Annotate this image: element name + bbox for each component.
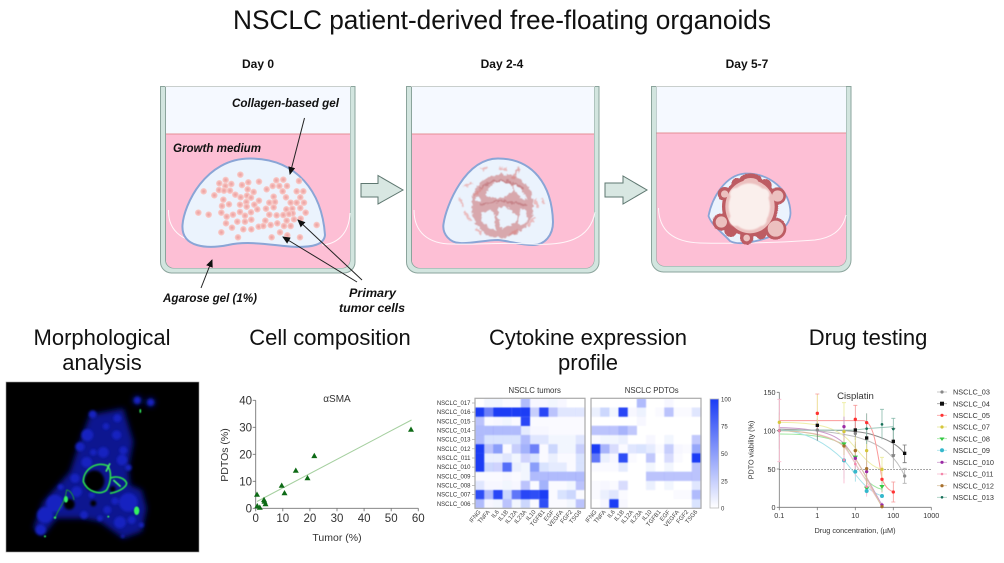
panel: confocal microscopy image <box>6 382 199 552</box>
row labels <box>437 401 471 508</box>
row labels: NSCLC_013 <box>437 438 471 444</box>
legend: NSCLC_07 <box>953 423 990 432</box>
heatmap: tumors <box>475 398 585 508</box>
heading: morphological analysis: Morphological <box>34 325 170 350</box>
row labels: NSCLC_006 <box>437 502 471 508</box>
label: primary tumor cells: tumor cells <box>339 303 405 315</box>
y ticks <box>764 388 776 512</box>
column labels PDTOs: FGF2 <box>676 509 691 525</box>
y ticks: 100 <box>764 426 776 436</box>
title: NSCLC patient-derived free-floating organoids <box>233 5 771 35</box>
heatmap frames <box>472 398 701 508</box>
x ticks: 0.1 <box>774 511 784 520</box>
y ticks: 10 <box>239 476 252 488</box>
heading: cell composition: Cell composition <box>249 325 411 350</box>
y ticks: 50 <box>768 465 776 474</box>
arrow: day 0 to day 2-4 <box>361 176 403 204</box>
y ticks: 150 <box>764 388 776 397</box>
panel: scatter chart aSMA <box>219 394 425 544</box>
colour scale: 25 <box>721 480 728 486</box>
data points <box>254 426 414 510</box>
row labels: NSCLC_007 <box>437 493 471 499</box>
y ticks: 30 <box>239 422 252 434</box>
row labels: NSCLC_014 <box>437 428 471 434</box>
axes <box>253 400 418 511</box>
organoid <box>713 173 786 245</box>
column labels PDTOs: IFNG <box>585 509 599 524</box>
column labels tumors: FGF2 <box>560 509 575 525</box>
x axis label: Drug concentration, (µM) <box>814 526 896 535</box>
panel: cisplatin dose response chart <box>746 388 994 535</box>
panel: cytokine heatmaps <box>437 386 732 529</box>
x ticks: 10 <box>276 513 289 525</box>
column labels tumors: TGFB1 <box>530 509 547 528</box>
colour scale: 0 <box>721 506 725 512</box>
y axis label: PDTOs (%) <box>219 428 231 482</box>
column labels PDTOs: TNFA <box>593 509 608 525</box>
legend: NSCLC_010 <box>953 458 994 467</box>
collagen gel <box>443 158 553 245</box>
heatmap title PDTOs: NSCLC PDTOs <box>625 386 679 395</box>
x ticks: 30 <box>331 513 343 525</box>
column labels PDTOs: IL1B <box>614 509 626 523</box>
y axis label: PDTO viability (%) <box>746 421 756 479</box>
panel: well day 2-4 <box>406 86 599 273</box>
column labels tumors: IFNG <box>469 509 483 524</box>
y ticks: 40 <box>239 396 252 408</box>
x ticks: 10 <box>851 511 859 520</box>
tumor cells <box>195 171 320 241</box>
collagen gel <box>708 173 790 243</box>
colour scale: 75 <box>721 424 728 430</box>
fibrous cell network <box>459 168 544 238</box>
green fluorescence <box>55 463 127 518</box>
heading: cytokine expression profile: profile <box>558 350 618 375</box>
label: growth medium: Growth medium <box>173 143 261 155</box>
row labels: NSCLC_016 <box>437 410 471 416</box>
x ticks: 1 <box>815 511 819 520</box>
legend <box>937 388 994 502</box>
heatmap: PDTOs <box>591 398 701 508</box>
column labels tumors <box>469 509 584 529</box>
heatmap title tumors: NSCLC tumors <box>508 386 561 395</box>
collagen gel droplet <box>182 158 325 247</box>
column labels PDTOs: TGFB1 <box>646 509 663 528</box>
column labels tumors: IL23A <box>514 509 528 525</box>
heading: Day 0: Day 0 <box>242 57 274 71</box>
column labels PDTOs: VEGFA <box>664 509 681 529</box>
heading: Day 2-4: Day 2-4 <box>481 57 524 71</box>
legend: NSCLC_011 <box>953 470 993 479</box>
column labels PDTOs: EGF <box>659 509 672 523</box>
legend: NSCLC_05 <box>953 411 990 420</box>
heading: drug testing: Drug testing <box>809 325 927 350</box>
chart title: Cisplatin <box>837 391 874 402</box>
legend: NSCLC_04 <box>953 399 990 408</box>
row labels: NSCLC_010 <box>437 465 471 471</box>
column labels PDTOs: IL23A <box>630 509 644 525</box>
arrow: day 2-4 to day 5-7 <box>605 176 647 204</box>
colour scale: 50 <box>721 452 728 458</box>
colour scale <box>710 398 732 512</box>
x ticks: 60 <box>412 513 425 525</box>
x ticks: 1000 <box>923 511 939 520</box>
regression line <box>257 420 412 502</box>
column labels PDTOs: IL6 <box>607 509 617 520</box>
reference line at 50% <box>779 468 931 470</box>
x axis label: Tumor (%) <box>312 532 362 544</box>
x ticks <box>252 513 425 525</box>
x ticks: 0 <box>252 513 259 525</box>
label: primary tumor cells: Primary <box>349 288 397 300</box>
column labels tumors: TSG6 <box>569 509 584 525</box>
label: collagen-based gel: Collagen-based gel <box>232 98 340 110</box>
annotation arrows <box>201 118 362 288</box>
column labels PDTOs <box>585 509 700 529</box>
heading: Day 5-7: Day 5-7 <box>726 57 769 71</box>
y ticks <box>239 396 252 516</box>
label: primary tumor cells <box>339 288 405 315</box>
agarose curve <box>168 210 350 245</box>
axes <box>777 392 931 510</box>
error bars <box>777 394 907 507</box>
legend: NSCLC_012 <box>953 481 994 490</box>
markers <box>778 412 906 508</box>
chart title: αSMA <box>323 394 351 405</box>
y ticks: 20 <box>239 450 252 462</box>
x ticks <box>774 511 939 520</box>
x ticks: 20 <box>304 513 316 525</box>
y ticks: 0 <box>246 504 252 516</box>
x ticks: 100 <box>887 511 899 520</box>
column labels tumors: EGF <box>543 509 556 523</box>
x ticks: 40 <box>358 513 370 525</box>
heading: morphological analysis: analysis <box>62 350 142 375</box>
row labels: NSCLC_015 <box>437 419 471 425</box>
column labels tumors: TNFA <box>477 509 492 525</box>
row labels: NSCLC_008 <box>437 484 471 490</box>
colour scale: 100 <box>721 398 732 404</box>
label: agarose gel: Agarose gel (1%) <box>162 293 257 305</box>
column labels tumors: IL12A <box>505 509 519 525</box>
column labels PDTOs: IL12A <box>621 509 635 525</box>
column labels tumors: IL10 <box>525 509 538 522</box>
column labels PDTOs: IL10 <box>641 509 654 522</box>
panel: well day 0 <box>160 86 405 315</box>
y ticks: 0 <box>772 503 776 512</box>
agarose curve <box>658 208 846 243</box>
column labels tumors: IL6 <box>491 509 501 520</box>
row labels: NSCLC_012 <box>437 447 471 453</box>
column labels PDTOs: TSG6 <box>685 509 700 525</box>
legend: NSCLC_013 <box>953 493 994 502</box>
dose response curves <box>777 394 907 508</box>
row labels: NSCLC_011 <box>437 456 471 462</box>
column labels tumors: VEGFA <box>548 509 565 529</box>
row labels: NSCLC_017 <box>437 401 471 407</box>
panel: well day 5-7 <box>652 86 851 272</box>
heading: cytokine expression profile: Cytokine expression <box>489 325 687 350</box>
column labels tumors: IL1B <box>498 509 510 523</box>
row labels: NSCLC_009 <box>437 474 471 480</box>
legend: NSCLC_03 <box>953 388 990 397</box>
x ticks: 50 <box>385 513 398 525</box>
legend: NSCLC_09 <box>953 446 990 455</box>
agarose curve <box>414 210 595 244</box>
legend: NSCLC_08 <box>953 434 990 443</box>
